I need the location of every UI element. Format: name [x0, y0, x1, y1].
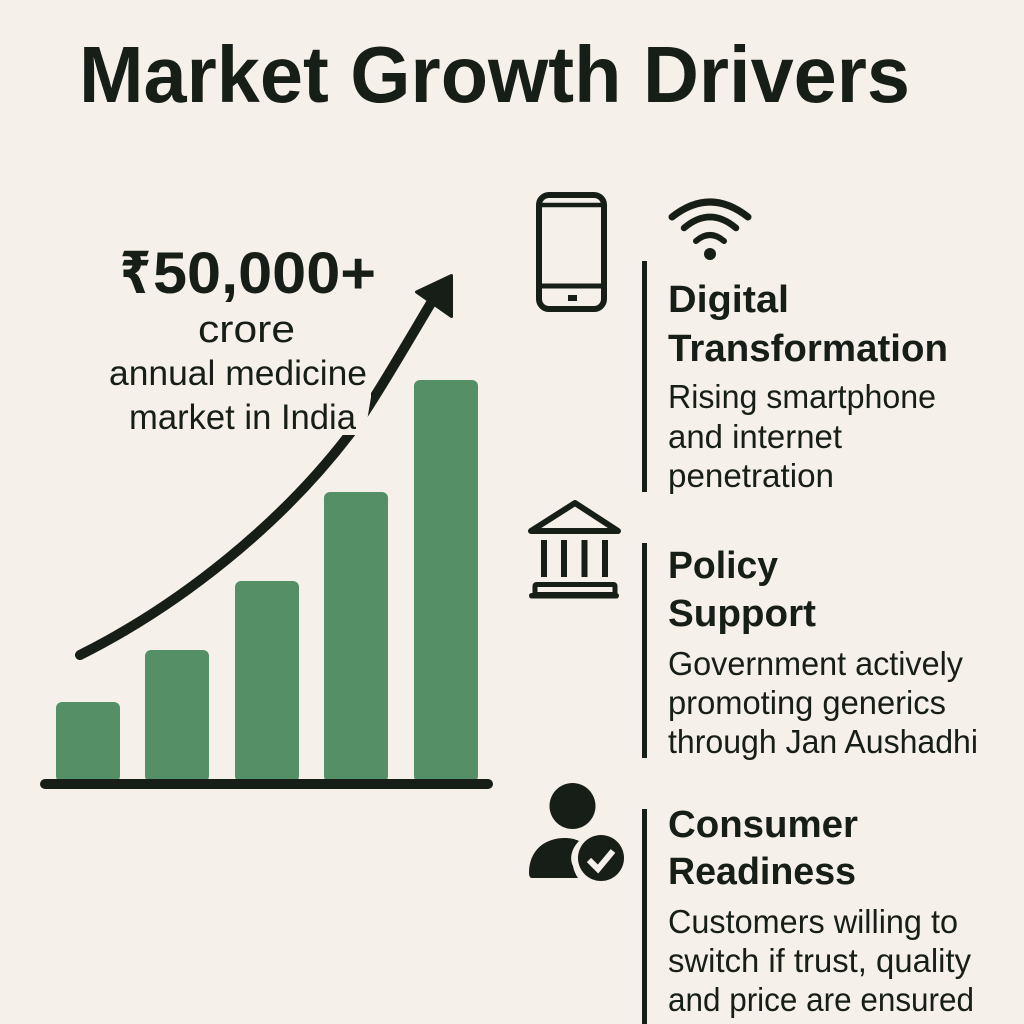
- bar 2: [145, 650, 209, 782]
- market figure: ₹: [120, 241, 151, 306]
- callout backing: [100, 355, 371, 435]
- body text line 3: and price are ensured: [668, 981, 974, 1018]
- body text line 3: penetration: [668, 457, 834, 494]
- bar 5: [414, 380, 478, 782]
- driver: digital transformation: [642, 261, 948, 494]
- icon: government building: [529, 503, 619, 598]
- divider: [642, 261, 647, 492]
- body text line 2: switch if trust, quality: [668, 942, 971, 979]
- market size callout: [100, 241, 376, 437]
- divider: [642, 809, 647, 1024]
- heading: Policy: [668, 545, 778, 587]
- bar 4: [324, 492, 388, 782]
- growth arrow: [80, 276, 452, 655]
- bar 3: [235, 581, 299, 782]
- driver: policy support: [642, 543, 978, 760]
- chart baseline: [40, 779, 493, 789]
- icon: smartphone: [539, 195, 604, 309]
- market description line 1: annual medicine: [109, 354, 367, 393]
- title: Market Growth Drivers: [79, 30, 910, 119]
- icon: verified consumer: [529, 783, 624, 881]
- body text line 3: through Jan Aushadhi: [668, 723, 978, 760]
- bar 1: [56, 702, 120, 782]
- body text: Rising smartphone: [668, 378, 936, 415]
- icon: wifi: [672, 202, 748, 260]
- heading line 2: Transformation: [668, 328, 948, 370]
- body text: Customers willing to: [668, 903, 958, 940]
- heading line 2: Readiness: [668, 851, 856, 893]
- divider: [642, 543, 647, 758]
- driver: consumer readiness: [642, 804, 974, 1024]
- body text: Government actively: [668, 645, 963, 682]
- heading: Consumer: [668, 804, 858, 846]
- market description line 2: market in India: [129, 398, 357, 437]
- bar chart: [40, 380, 493, 789]
- body text line 2: and internet: [668, 418, 842, 455]
- heading: Digital: [668, 279, 789, 321]
- body text line 2: promoting generics: [668, 684, 946, 721]
- heading line 2: Support: [668, 593, 816, 635]
- market figure: 50,000+: [153, 241, 376, 306]
- crore label: crore: [198, 309, 295, 351]
